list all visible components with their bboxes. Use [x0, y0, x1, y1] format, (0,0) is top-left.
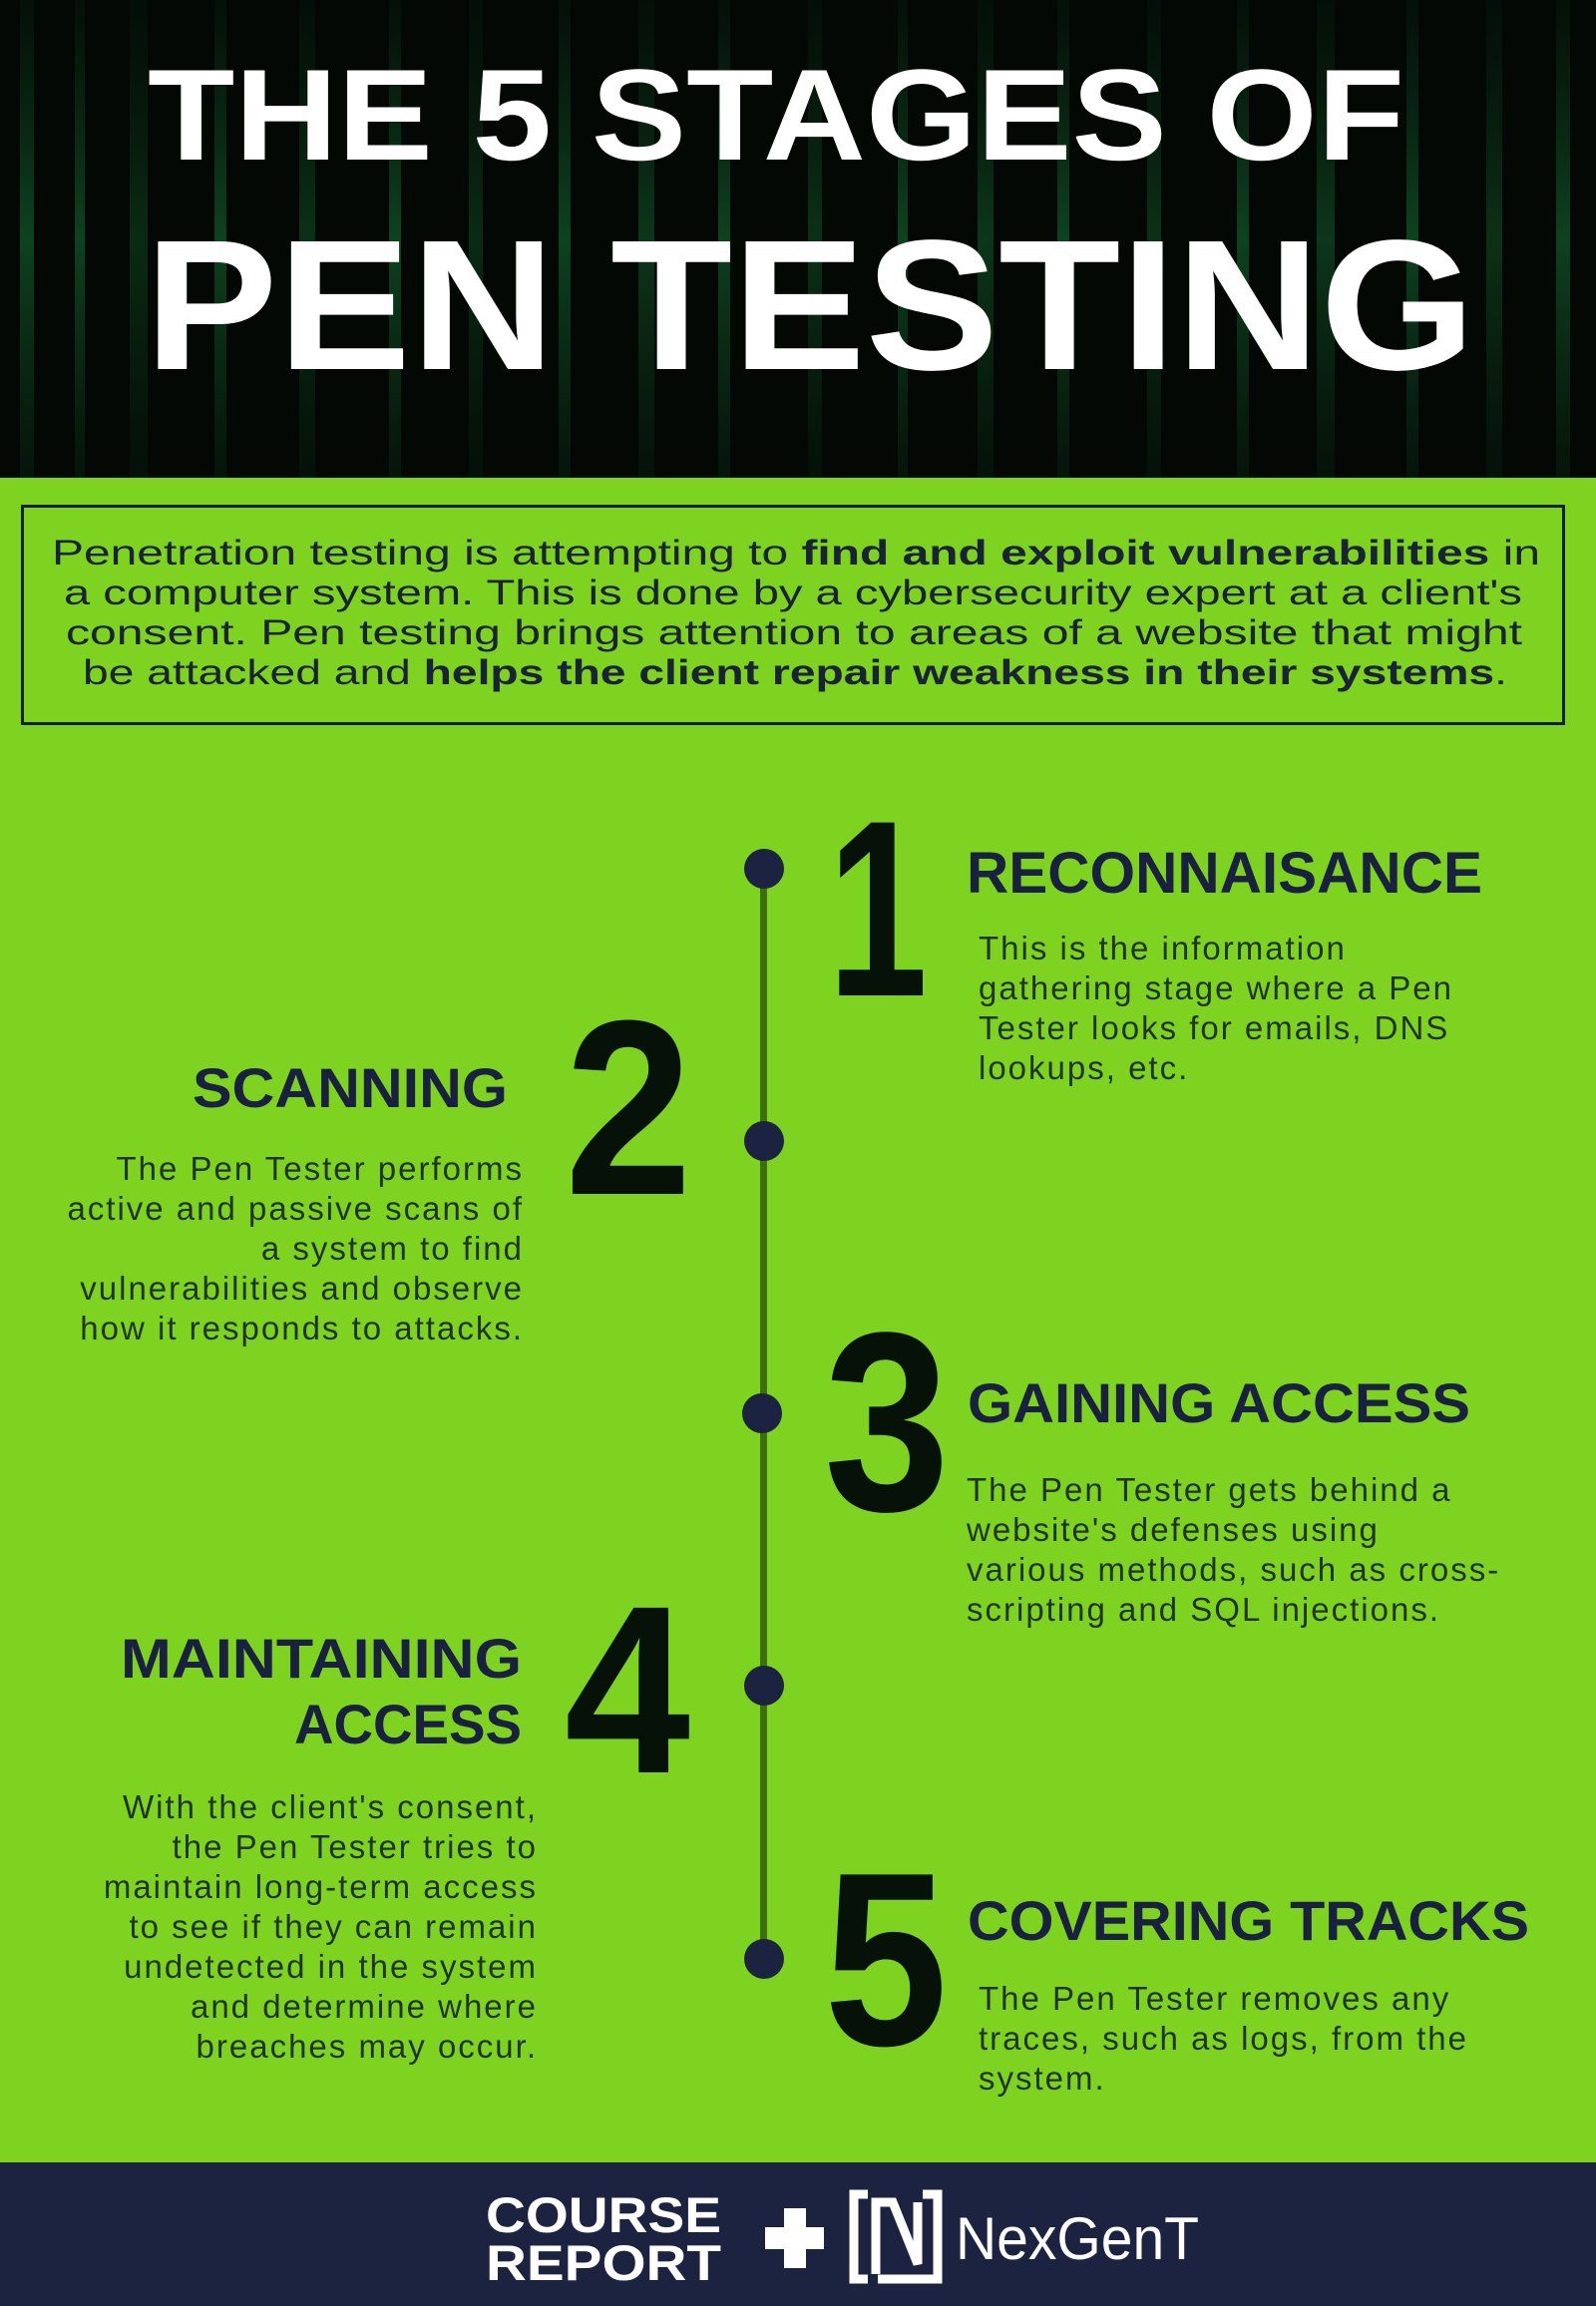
- body 2: active and passive scans of: [67, 1190, 524, 1227]
- body 4: undetected in the system: [124, 1948, 538, 1985]
- intro box: be attacked and helps the client repair weakness in their systems .: [83, 653, 1507, 692]
- heading: scanning: SCANNING: [193, 1056, 508, 1119]
- intro box: Penetration testing is attempting to find and exploit vulnerabilities in: [52, 534, 1540, 573]
- title: THE 5 STAGES OF: [148, 42, 1404, 188]
- body 4: breaches may occur.: [197, 2028, 538, 2065]
- body 5: system.: [979, 2060, 1106, 2097]
- heading: maintaining access: [121, 1627, 522, 1755]
- intro box: consent. Pen testing brings attention to areas of a website that might: [66, 613, 1522, 652]
- body 1: lookups, etc.: [979, 1049, 1189, 1086]
- number 2: 2: [565, 968, 692, 1247]
- stage 4: [104, 1556, 690, 2065]
- stage 3: [824, 1280, 1500, 1628]
- body 3: scripting and SQL injections.: [967, 1591, 1440, 1628]
- body 2: [67, 1150, 524, 1346]
- stage 1: [828, 769, 1482, 1086]
- body 4: [104, 1788, 538, 2065]
- body 2: vulnerabilities and observe: [80, 1270, 524, 1307]
- stage 5: [824, 1820, 1529, 2098]
- green background: [0, 478, 1596, 2162]
- heading: maintaining access: MAINTAINING: [121, 1627, 522, 1690]
- logo: course report: COURSE: [486, 2187, 721, 2243]
- body 4: and determine where: [191, 1988, 538, 2025]
- body 1: [979, 930, 1453, 1086]
- body 4: With the client's consent,: [123, 1788, 538, 1825]
- body 5: [979, 1980, 1468, 2097]
- body 3: The Pen Tester gets behind a: [967, 1471, 1452, 1508]
- logo: course report: REPORT: [486, 2235, 721, 2291]
- intro box: a computer system. This is done by a cybersecurity expert at a client's: [64, 574, 1522, 612]
- body 3: [966, 1471, 1500, 1628]
- body 3: website's defenses using: [966, 1511, 1380, 1548]
- icon: plus: [765, 2208, 824, 2268]
- heading: maintaining access: ACCESS: [294, 1693, 522, 1755]
- intro box: [22, 507, 1564, 724]
- number 1: 1: [828, 769, 928, 1049]
- stage 2: [67, 968, 692, 1346]
- body 4: maintain long-term access: [104, 1868, 538, 1905]
- body 1: gathering stage where a Pen: [979, 969, 1453, 1006]
- timeline: [742, 849, 784, 1979]
- body 1: Tester looks for emails, DNS: [979, 1009, 1449, 1046]
- title: PEN TESTING: [145, 202, 1475, 409]
- body 5: The Pen Tester removes any: [979, 1980, 1450, 2017]
- footer: [0, 2162, 1596, 2306]
- logo: course report: [486, 2187, 721, 2291]
- body 4: the Pen Tester tries to: [173, 1828, 538, 1865]
- heading: gaining access: GAINING ACCESS: [968, 1371, 1470, 1434]
- number 5: 5: [824, 1820, 948, 2098]
- body 5: traces, such as logs, from the: [979, 2020, 1468, 2057]
- body 2: a system to find: [261, 1230, 524, 1267]
- number 3: 3: [824, 1280, 950, 1565]
- body 3: various methods, such as cross-: [967, 1551, 1500, 1588]
- heading: reconnaisance: RECONNAISANCE: [967, 841, 1482, 906]
- header background: [0, 0, 1596, 478]
- number 4: 4: [565, 1556, 690, 1823]
- body 1: This is the information: [979, 930, 1347, 966]
- logo: nexgent: NexGenT: [956, 2205, 1199, 2272]
- body 2: how it responds to attacks.: [80, 1310, 524, 1346]
- icon: nexgent logo: [854, 2194, 938, 2279]
- body 4: to see if they can remain: [129, 1908, 538, 1945]
- body 2: The Pen Tester performs: [116, 1150, 524, 1187]
- title: [145, 42, 1475, 409]
- heading: covering tracks: COVERING TRACKS: [968, 1889, 1529, 1952]
